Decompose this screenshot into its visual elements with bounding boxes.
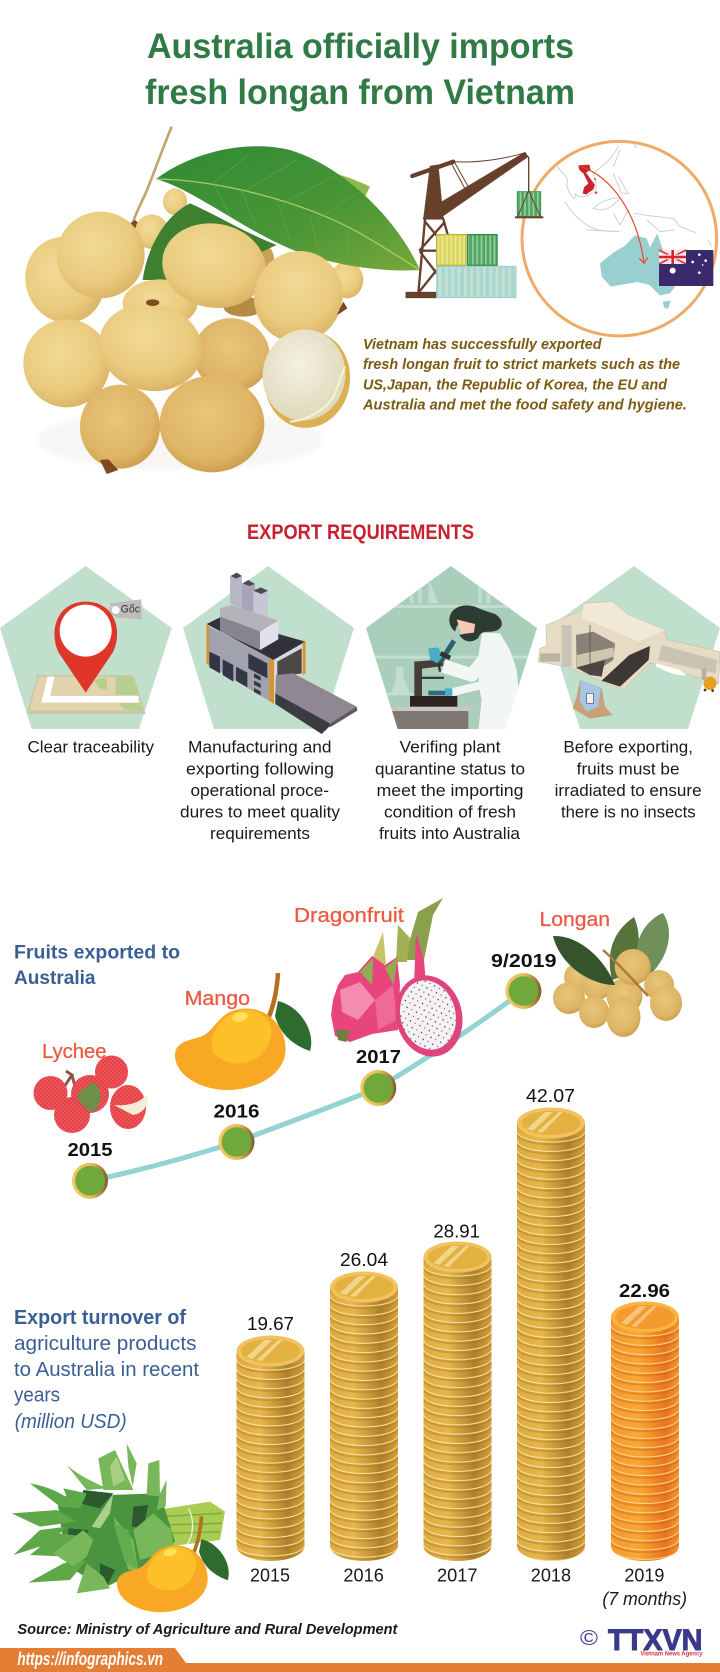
illustration: mango — [117, 1516, 229, 1612]
timeline: 2017 dragonfruit: 2017 — [356, 1046, 401, 1067]
bar: 2018: 42.07 — [526, 1085, 575, 1106]
heading: export turnover: to Australia in recent — [14, 1359, 199, 1381]
caption: fruits must be — [577, 760, 680, 778]
bar: 2015: 2015 — [250, 1565, 290, 1586]
title — [145, 27, 575, 112]
caption: Manufacturing and — [188, 739, 332, 757]
caption: fruits into Australia — [379, 825, 521, 843]
timeline: 2016 mango: 2016 — [214, 1101, 260, 1122]
bar: 2019: (7 months) — [602, 1589, 687, 1609]
main leaf — [156, 146, 420, 270]
caption: operational proce- — [190, 782, 329, 800]
timeline curve — [90, 991, 523, 1181]
intro paragraph: fresh longan fruit to strict markets such as the — [363, 356, 680, 373]
timeline: 9/2019 longan: Longan — [540, 908, 610, 931]
heading: export requirements: EXPORT REQUIREMENTS — [247, 521, 474, 544]
caption: irradiated to ensure — [555, 782, 702, 800]
heading: export turnover — [14, 1307, 199, 1433]
timeline: 2015 lychee: 2015 — [68, 1139, 112, 1160]
caption — [555, 739, 702, 822]
intro paragraph: US,Japan, the Republic of Korea, the EU and — [363, 376, 668, 394]
Australia — [600, 233, 675, 295]
bar: 2018 — [517, 1085, 585, 1586]
heading: fruits exported to Australia: Australia — [14, 967, 96, 989]
icon: map with location pin — [27, 599, 146, 714]
footer bar with URL — [0, 1648, 720, 1672]
bar: 2019: 22.96 — [619, 1280, 670, 1301]
heading: export turnover: agriculture products — [14, 1333, 196, 1355]
caption: dures to meet quality — [180, 804, 341, 822]
icon: longan — [553, 913, 682, 1037]
intro paragraph: Vietnam has successfully exported — [363, 336, 602, 353]
timeline: 9/2019 longan — [491, 908, 682, 1037]
caption: Before exporting, — [563, 739, 693, 757]
bar: 2017: 2017 — [437, 1565, 478, 1586]
timeline: 2015 lychee — [34, 1040, 147, 1199]
panel: manufacturing — [180, 566, 357, 843]
bar: 2015 — [236, 1313, 304, 1586]
icon: map with location pin: Gốc — [121, 603, 140, 615]
caption — [375, 739, 525, 843]
bar: 2017: 28.91 — [433, 1221, 480, 1242]
icon: scientist at microscope — [374, 582, 528, 729]
panel: irradiation — [538, 566, 720, 822]
caption: Clear traceability — [28, 739, 155, 757]
intro paragraph — [362, 336, 687, 414]
caption: exporting following — [186, 760, 334, 778]
panel: traceability — [0, 566, 172, 757]
heading: export turnover: Export turnover of — [14, 1307, 186, 1329]
source note: Source: Ministry of Agriculture and Rural Development — [17, 1621, 398, 1638]
timeline: 2015 lychee: Lychee — [42, 1040, 106, 1063]
stem — [133, 127, 172, 223]
caption: condition of fresh — [384, 804, 516, 822]
chart: export turnover coin stacks — [236, 1085, 687, 1609]
bar: 2016: 26.04 — [340, 1249, 388, 1270]
bar: 2015: 19.67 — [247, 1313, 294, 1334]
bar: 2018: 2018 — [531, 1565, 571, 1586]
intro paragraph: Australia and met the food safety and hygiene. — [362, 396, 687, 414]
bar: 2016: 2016 — [343, 1565, 384, 1586]
bar: 2019: 2019 — [624, 1565, 664, 1586]
hanging container — [515, 157, 543, 218]
timeline: 9/2019 longan: 9/2019 — [491, 950, 556, 971]
Vietnam — [578, 165, 595, 195]
logo: TTXVN: TTXVN — [608, 1624, 702, 1657]
caption: requirements — [210, 825, 310, 843]
caption: Verifing plant — [400, 739, 501, 757]
bar: 2017 — [424, 1221, 492, 1586]
heading: export turnover: (million USD) — [15, 1411, 127, 1433]
timeline: 2016 mango: Mango — [185, 987, 250, 1010]
flag — [659, 250, 713, 286]
icon: dragonfruit — [331, 898, 471, 1064]
icon: mango — [175, 973, 311, 1090]
title: fresh longan from Vietnam — [145, 73, 575, 112]
map circle: route from Vietnam to Australia — [522, 141, 717, 336]
panel: plant quarantine — [360, 566, 540, 843]
illustration: water spinach bundle — [12, 1443, 225, 1593]
logo: TTXVN: Vietnam News Agency — [640, 1650, 703, 1658]
footer bar with URL: https://infographics.vn — [17, 1649, 163, 1669]
icon: irradiation facility cutaway — [538, 602, 720, 719]
bar: 2019 — [602, 1280, 687, 1609]
caption: quarantine status to — [375, 760, 525, 778]
stacked containers — [437, 235, 516, 298]
crane and containers — [406, 152, 543, 298]
heading: fruits exported to Australia: Fruits exported to — [14, 942, 180, 964]
small back leaf — [333, 173, 370, 200]
route arrow — [582, 167, 648, 263]
caption: there is no insects — [561, 804, 696, 822]
caption — [180, 739, 341, 843]
bar: 2016 — [330, 1249, 398, 1586]
caption: meet the importing — [376, 782, 524, 800]
title: Australia officially imports — [147, 27, 574, 66]
photo: longan fruit bunch with leaves — [14, 127, 420, 474]
timeline: 2017 dragonfruit — [294, 898, 471, 1106]
icon: factory with conveyor — [206, 573, 357, 734]
heading: fruits exported to Australia — [14, 942, 180, 989]
timeline: 2016 mango — [175, 973, 311, 1160]
back leaf — [143, 203, 277, 280]
icon: lychee — [34, 1056, 147, 1133]
timeline: 2017 dragonfruit: Dragonfruit — [294, 904, 404, 927]
logo: TTXVN: © — [580, 1627, 599, 1650]
heading: export turnover: years — [14, 1385, 60, 1407]
fruits — [14, 227, 116, 333]
